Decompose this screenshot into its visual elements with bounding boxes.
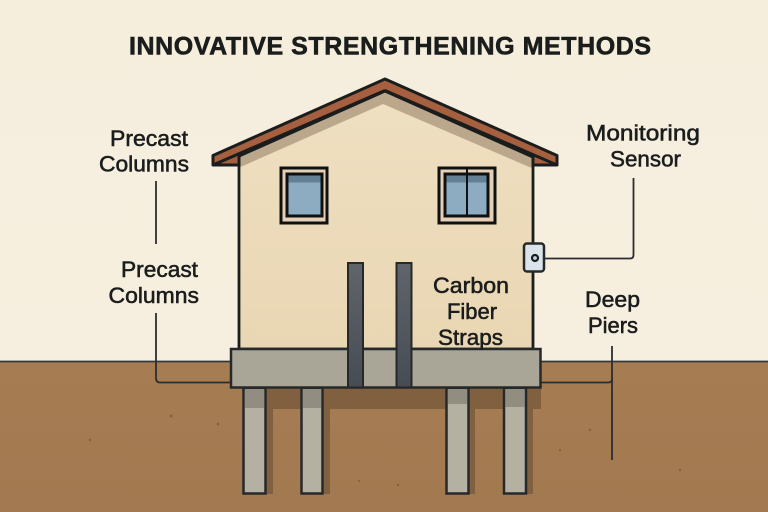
window: left xyxy=(281,168,327,223)
leader lines xyxy=(156,178,634,460)
carbon fiber strap left xyxy=(348,263,363,388)
label: precast columns upper: Precast xyxy=(110,126,188,151)
label: precast columns upper xyxy=(99,126,189,176)
carbon fiber strap right xyxy=(396,263,412,388)
label: deep piers: Deep xyxy=(585,287,640,312)
ground xyxy=(0,361,768,512)
house wall xyxy=(239,90,533,349)
background xyxy=(0,0,768,362)
foundation shadow xyxy=(243,388,541,494)
label: deep piers: Piers xyxy=(588,313,638,338)
window: right xyxy=(439,168,495,223)
label: precast columns lower: Precast xyxy=(121,257,198,282)
roof xyxy=(213,79,557,165)
label: monitoring sensor: Monitoring xyxy=(586,120,700,146)
title: INNOVATIVE STRENGTHENING METHODS xyxy=(129,32,651,60)
icon: monitoring sensor xyxy=(524,244,544,272)
label: carbon fiber straps xyxy=(433,273,509,350)
foundation slab xyxy=(231,349,540,388)
label: precast columns upper: Columns xyxy=(99,152,189,176)
label: precast columns lower xyxy=(108,257,199,308)
label: carbon fiber straps: Carbon xyxy=(433,273,509,298)
label: precast columns lower: Columns xyxy=(108,283,199,308)
label: monitoring sensor: Sensor xyxy=(610,146,681,172)
label: monitoring sensor xyxy=(586,120,700,172)
deep piers xyxy=(244,388,526,494)
label: deep piers xyxy=(585,287,640,338)
label: carbon fiber straps: Straps xyxy=(438,325,503,350)
label: carbon fiber straps: Fiber xyxy=(447,299,497,324)
